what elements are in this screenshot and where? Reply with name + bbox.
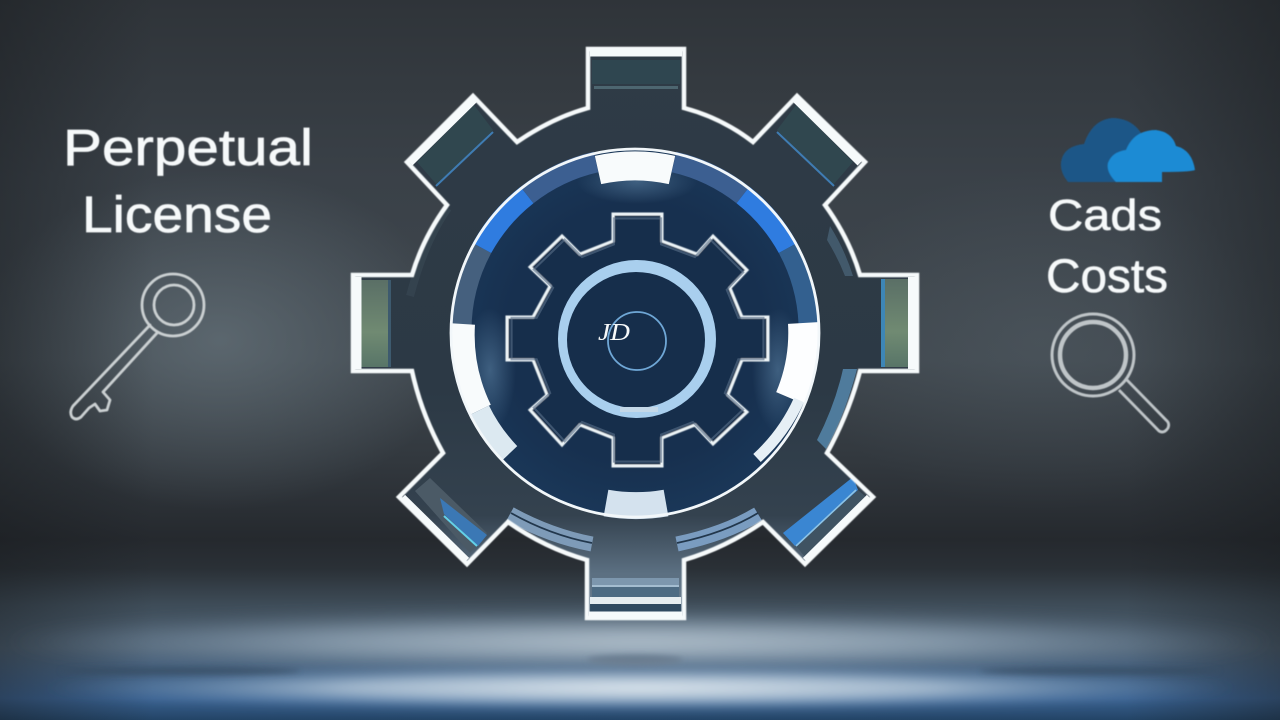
cog bevel [512,218,763,462]
heading: cloud costs [1046,191,1168,302]
icon: key [71,274,204,419]
light halos [464,160,804,432]
heading: cloud costs: Costs [1046,249,1168,302]
heading: cloud costs: Cads [1048,191,1162,240]
heading: perpetual license [63,119,313,243]
bottom tooth stripes [590,578,681,612]
heading: perpetual license: License [82,186,272,243]
gear: central dial ring [451,149,819,517]
gear outline [353,49,917,618]
gear floor shadow [587,655,683,665]
floor light reflection [0,612,1280,711]
light blue inner ring [558,260,716,418]
center glyph: JD [598,320,630,346]
icon: magnifier [1052,314,1169,432]
icon: cloud [1061,118,1195,182]
gear: outer [353,49,917,618]
heading: perpetual license: Perpetual [63,119,313,176]
ring segments [461,162,809,506]
tooth panels [361,60,910,557]
gear: inner cog [507,214,768,466]
valley arcs [410,208,857,544]
gear body [353,49,917,618]
